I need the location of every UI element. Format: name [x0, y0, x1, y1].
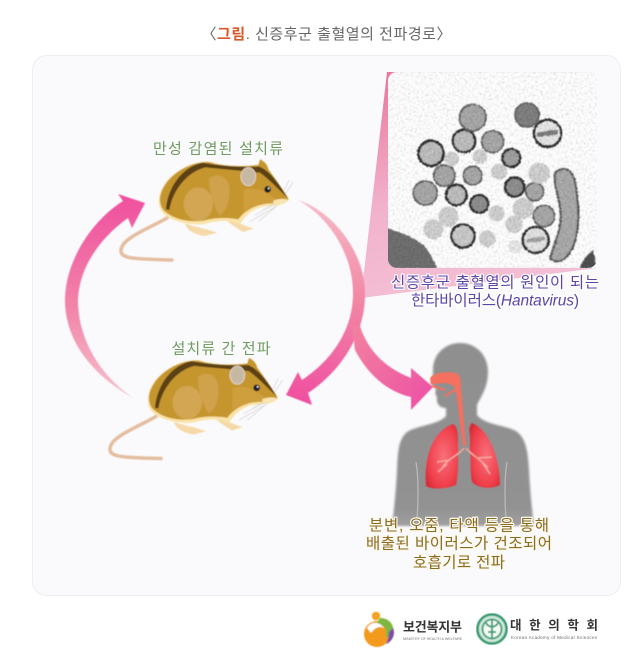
logo: Korean Academy of Medical Sciences: [478, 614, 598, 644]
panel: transmission diagram: [32, 56, 620, 596]
label: chronic infected rodent: 만성 감염된 설치류: [153, 140, 283, 158]
label: transmission between rodents: 설치류 간 전파: [172, 340, 271, 358]
rod particle: [550, 169, 579, 261]
arm separators: [416, 462, 507, 520]
caption: airborne transmission: 호흡기로 전파: [413, 554, 505, 572]
caption: hantavirus: 신증후군 출혈열의 원인이 되는: [391, 274, 599, 292]
cell mass, bottom left: [387, 228, 437, 268]
title: 〈그림. 신증후군 출혈열의 전파경로〉: [202, 26, 452, 43]
caption: hantavirus: [391, 274, 599, 310]
lungs: [426, 423, 500, 489]
caption: airborne transmission: 배출된 바이러스가 건조되어: [366, 534, 552, 552]
logo: Ministry of Health and Welfare: [364, 612, 463, 647]
caption: airborne transmission: 분변, 오줌, 타액 등을 통해: [369, 516, 549, 534]
arrow: rodent to human: [352, 326, 433, 410]
ministry emblem: [364, 612, 394, 647]
arrow: rodent to rodent, right arc: [286, 200, 365, 405]
rodent: upper: [121, 159, 293, 260]
ministry name: 보건복지부: [403, 620, 462, 634]
rodent: lower: [110, 358, 282, 458]
caption: hantavirus: 한타바이러스(Hantavirus): [411, 292, 579, 310]
academy name: 대 한 의 학 회: [510, 618, 598, 632]
academy emblem: [478, 614, 506, 644]
virus micrograph: [387, 72, 600, 268]
arrow: rodent to rodent, left arc: [65, 194, 145, 398]
logo: Ministry of Health and Welfare: MINISTRY OF HEALTH & WELFARE: [403, 637, 463, 641]
human figure with respiratory tract: [392, 343, 534, 526]
trachea and nasal passage: [430, 372, 466, 446]
logo: Korean Academy of Medical Sciences: Korean Academy of Medical Sciences: [511, 635, 598, 640]
caption: airborne transmission: [366, 516, 552, 572]
pointer wedge to virus photo: [361, 72, 597, 298]
silhouette: [392, 343, 534, 526]
